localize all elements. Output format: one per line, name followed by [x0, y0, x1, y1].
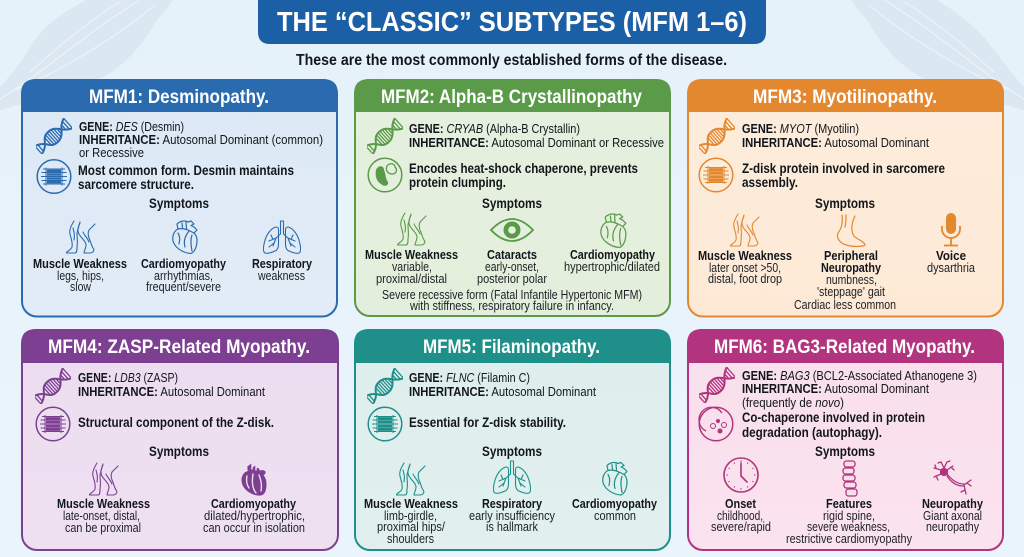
symptom: voice: dysarthria: [927, 261, 975, 275]
icon: clock: [724, 458, 758, 492]
symptom: features: rigid spine,: [823, 509, 875, 523]
symptom: neuropathy: Neuropathy: [922, 496, 984, 511]
icon: DNA: [693, 113, 741, 159]
description: [78, 163, 294, 192]
icon: legs: [66, 221, 95, 253]
symptom: features: severe weakness,: [807, 520, 890, 534]
symptom: cardiomyopathy: [564, 214, 660, 274]
symptom: cataracts: [477, 219, 547, 286]
gene and inheritance: [79, 119, 323, 160]
symptom: muscle weakness: [698, 214, 792, 286]
symptom: cardiomyopathy: [203, 463, 305, 535]
icon: autophagy: [699, 407, 733, 441]
symptom: respiratory: Respiratory: [482, 496, 543, 511]
icon: legs: [730, 214, 759, 246]
icon: legs: [396, 463, 425, 495]
symptom: features: restrictive cardiomyopathy: [786, 532, 913, 546]
symptom: peripheral neuropathy: 'steppage' gait: [817, 285, 885, 299]
title banner: THE “CLASSIC” SUBTYPES (MFM 1–6): [277, 6, 747, 37]
symptom: muscle weakness: limb-girdle,: [384, 509, 437, 523]
symptom: respiratory: [469, 461, 556, 534]
symptom: peripheral neuropathy: numbness,: [826, 273, 877, 287]
description: [742, 161, 945, 190]
symptom: muscle weakness: [364, 463, 458, 546]
symptoms heading: Symptoms: [482, 195, 542, 211]
icon: heart: [173, 221, 197, 254]
symptom: muscle weakness: Muscle Weakness: [57, 496, 150, 511]
symptom: respiratory: weakness: [257, 269, 305, 283]
gene and inheritance: GENE: BAG3 (BCL2-Associated Athanogene 3): [742, 368, 977, 383]
icon: DNA: [30, 113, 78, 159]
symptom: peripheral neuropathy: [794, 215, 896, 312]
symptom: onset: Onset: [725, 496, 757, 511]
symptom: muscle weakness: late-onset, distal,: [63, 509, 140, 523]
panel: MFM6: [687, 329, 1004, 550]
symptom: peripheral neuropathy: Peripheral: [824, 248, 878, 263]
symptom: features: [786, 461, 913, 546]
symptom: muscle weakness: [57, 463, 150, 535]
symptom: muscle weakness: Muscle Weakness: [33, 256, 127, 271]
symptoms heading: Symptoms: [149, 443, 209, 459]
gene and inheritance: INHERITANCE: Autosomal Dominant (common): [79, 132, 323, 147]
symptom: neuropathy: [922, 461, 984, 534]
icon: heart: [601, 214, 626, 247]
severe recessive note: Severe recessive form (Fatal Infantile Hypertonic MFM): [382, 288, 642, 302]
icon: legs: [89, 463, 118, 495]
panel: MFM1: [21, 79, 338, 316]
heading: MFM6: BAG3-Related Myopathy.: [714, 337, 975, 358]
heading: MFM3: Myotilinopathy.: [753, 87, 937, 108]
symptom: cardiomyopathy: can occur in isolation: [203, 521, 305, 535]
symptom: cardiomyopathy: hypertrophic/dilated: [564, 260, 660, 274]
heading: MFM1: Desminopathy.: [89, 87, 269, 108]
icon: DNA: [29, 363, 77, 409]
symptom: muscle weakness: variable,: [392, 260, 432, 274]
description: protein clumping.: [409, 175, 506, 190]
symptom: cardiomyopathy: dilated/hypertrophic,: [204, 509, 305, 523]
symptom: muscle weakness: shoulders: [387, 532, 434, 546]
description: [409, 161, 638, 190]
symptom: cardiomyopathy: Cardiomyopathy: [570, 247, 656, 262]
description: Structural component of the Z-disk.: [78, 415, 274, 430]
symptom: cardiomyopathy: Cardiomyopathy: [211, 496, 297, 511]
description: sarcomere structure.: [78, 177, 194, 192]
icon: z-disk: [368, 407, 402, 441]
icon: filled heart: [242, 463, 266, 495]
symptom: neuropathy: Giant axonal: [923, 509, 982, 523]
icon: DNA: [361, 113, 409, 159]
gene and inheritance: GENE: LDB3 (ZASP): [78, 370, 178, 385]
decorative muscle: right: [851, 0, 1024, 110]
description: Essential for Z-disk stability.: [409, 415, 566, 430]
symptom: muscle weakness: [365, 213, 458, 286]
symptom: neuropathy: neuropathy: [926, 520, 980, 534]
symptom: respiratory: [252, 221, 313, 283]
symptoms heading: Symptoms: [149, 195, 209, 211]
symptom: muscle weakness: [33, 221, 127, 294]
gene and inheritance: INHERITANCE: Autosomal Dominant or Recessive: [409, 135, 664, 150]
symptom: muscle weakness: distal, foot drop: [708, 272, 782, 286]
symptom: cardiomyopathy: [141, 221, 227, 294]
gene and inheritance: [409, 121, 664, 150]
symptoms heading: Symptoms: [482, 443, 542, 459]
icon: sarcomere: [37, 160, 71, 193]
symptom: voice: [927, 213, 975, 275]
symptom: muscle weakness: proximal hips/: [377, 520, 445, 534]
icon: DNA: [693, 362, 741, 408]
symptom: muscle weakness: later onset >50,: [709, 261, 781, 275]
icon: lungs: [493, 461, 531, 493]
symptom: cardiomyopathy: Cardiomyopathy: [572, 496, 658, 511]
symptom: respiratory: is hallmark: [486, 520, 539, 534]
gene and inheritance: [409, 370, 596, 399]
description: Co-chaperone involved in protein: [742, 410, 925, 425]
gene and inheritance: GENE: MYOT (Myotilin): [742, 121, 859, 136]
symptom: cardiomyopathy: common: [594, 509, 636, 523]
gene and inheritance: INHERITANCE: Autosomal Dominant: [742, 135, 929, 150]
icon: z-disk: [36, 407, 70, 441]
description: degradation (autophagy).: [742, 425, 882, 440]
symptom: respiratory: early insufficiency: [469, 509, 556, 523]
heading: MFM2: Alpha-B Crystallinopathy: [381, 87, 642, 108]
symptom: muscle weakness: proximal/distal: [376, 272, 447, 286]
gene and inheritance: GENE: FLNC (Filamin C): [409, 370, 530, 385]
symptom: cataracts: early-onset,: [485, 260, 539, 274]
icon: foot: [837, 215, 865, 246]
gene and inheritance: or Recessive: [79, 145, 144, 160]
symptom: peripheral neuropathy: Neuropathy: [821, 260, 882, 275]
symptoms heading: Symptoms: [815, 443, 875, 459]
symptom: muscle weakness: slow: [70, 280, 92, 294]
description: assembly.: [742, 175, 798, 190]
icon: legs: [397, 213, 426, 245]
description: [742, 410, 925, 440]
symptom: cataracts: Cataracts: [487, 247, 537, 262]
title banner: [258, 0, 766, 44]
panel: MFM4: [21, 329, 339, 550]
panel: MFM5: [354, 329, 671, 550]
gene and inheritance: INHERITANCE: Autosomal Dominant: [742, 381, 929, 396]
gene and inheritance: INHERITANCE: Autosomal Dominant: [409, 384, 596, 399]
gene and inheritance: GENE: CRYAB (Alpha-B Crystallin): [409, 121, 580, 136]
panel: MFM2: [354, 79, 671, 316]
gene and inheritance: INHERITANCE: Autosomal Dominant: [78, 384, 265, 399]
icon: protein clumps: [368, 158, 402, 192]
panel: MFM3: [687, 79, 1004, 316]
gene and inheritance: [742, 121, 929, 150]
icon: microphone: [942, 213, 960, 246]
symptom: muscle weakness: Muscle Weakness: [365, 247, 458, 262]
symptom: cardiomyopathy: frequent/severe: [146, 280, 221, 294]
icon: eye: [491, 219, 533, 241]
icon: spine: [843, 461, 857, 496]
icon: neuron: [934, 461, 971, 494]
heading: MFM4: ZASP-Related Myopathy.: [48, 337, 310, 358]
symptom: respiratory: Respiratory: [252, 256, 313, 271]
symptom: muscle weakness: can be proximal: [65, 521, 141, 535]
symptom: cardiomyopathy: Cardiomyopathy: [141, 256, 227, 271]
gene and inheritance: (frequently de novo): [742, 395, 844, 410]
severe recessive note: [382, 288, 642, 313]
symptom: onset: severe/rapid: [711, 520, 771, 534]
icon: DNA: [361, 363, 409, 409]
symptom: muscle weakness: Muscle Weakness: [364, 496, 458, 511]
severe recessive note: with stiffness, respiratory failure in infancy.: [409, 299, 614, 313]
symptom: voice: Voice: [936, 248, 966, 263]
symptom: cardiomyopathy: [572, 462, 658, 523]
gene and inheritance: GENE: DES (Desmin): [79, 119, 184, 134]
icon: heart: [603, 462, 627, 495]
description: Encodes heat-shock chaperone, prevents: [409, 161, 638, 176]
symptom: muscle weakness: legs, hips,: [57, 269, 104, 283]
subtitle: These are the most commonly established forms of the disease.: [296, 52, 727, 69]
gene and inheritance: [742, 368, 977, 410]
symptom: peripheral neuropathy: Cardiac less common: [794, 298, 896, 312]
symptom: muscle weakness: Muscle Weakness: [698, 248, 792, 263]
symptom: cataracts: posterior polar: [477, 272, 547, 286]
description: Z-disk protein involved in sarcomere: [742, 161, 945, 176]
symptoms heading: Symptoms: [815, 195, 875, 211]
decorative muscle: left: [0, 0, 173, 110]
gene and inheritance: [78, 370, 265, 399]
symptom: onset: [711, 458, 771, 534]
description: Most common form. Desmin maintains: [78, 163, 294, 178]
symptom: features: Features: [826, 496, 872, 511]
symptom: cardiomyopathy: arrhythmias,: [154, 269, 213, 283]
symptom: onset: childhood,: [717, 509, 763, 523]
icon: lungs: [263, 221, 301, 253]
icon: z-disk: [699, 158, 733, 192]
heading: MFM5: Filaminopathy.: [423, 337, 600, 358]
